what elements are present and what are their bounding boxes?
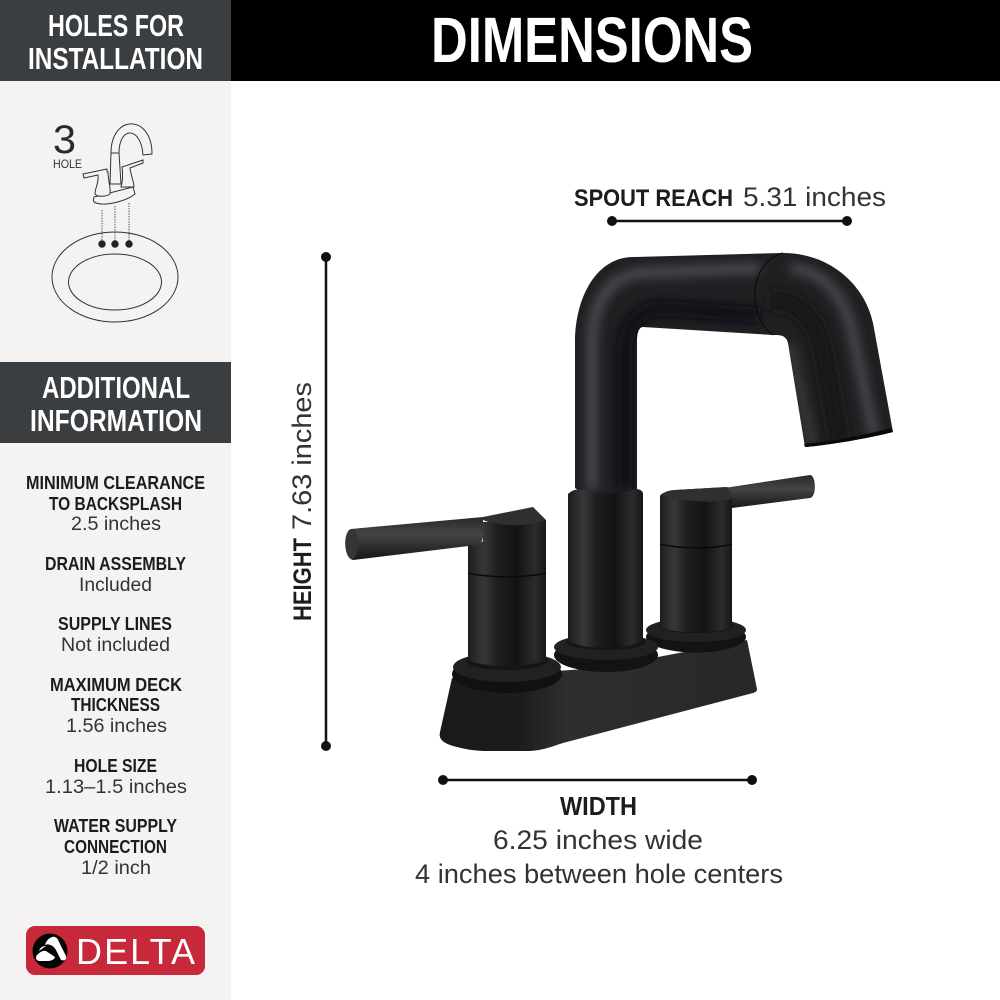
spec: hole size: 1.13–1.5 inches bbox=[45, 776, 187, 798]
logo: delta: DELTA bbox=[76, 931, 195, 972]
center ring bbox=[554, 634, 658, 672]
spec: supply lines bbox=[58, 614, 172, 656]
width dimension: 6.25 inches wide bbox=[493, 825, 703, 855]
spec: hole size bbox=[45, 756, 187, 798]
header: additional information: INFORMATION bbox=[30, 403, 202, 438]
spec: water supply connection: CONNECTION bbox=[64, 837, 167, 857]
spec: drain assembly: Included bbox=[79, 574, 152, 596]
title: dimensions bbox=[231, 0, 1000, 81]
spec: minimum clearance bbox=[26, 473, 205, 535]
header: additional information: ADDITIONAL bbox=[42, 370, 190, 405]
width dimension bbox=[415, 775, 783, 889]
height dimension: 7.63 inches bbox=[287, 382, 317, 530]
icon: 3 hole sink diagram bbox=[52, 118, 178, 322]
sidebar panel bbox=[0, 0, 231, 1000]
faucet product image bbox=[345, 253, 893, 751]
spec: minimum clearance: MINIMUM CLEARANCE bbox=[26, 473, 205, 493]
width dimension: 4 inches between hole centers bbox=[415, 859, 783, 889]
right handle bbox=[660, 475, 815, 632]
icon: 3 hole sink diagram: HOLE bbox=[53, 157, 82, 171]
icon: 3 hole sink diagram: 3 bbox=[53, 118, 76, 162]
spec: water supply connection: 1/2 inch bbox=[81, 857, 151, 879]
height dimension: HEIGHT bbox=[289, 538, 317, 621]
spec: minimum clearance: TO BACKSPLASH bbox=[49, 494, 182, 514]
header: holes for installation bbox=[0, 0, 231, 81]
header: holes for installation: HOLES FOR bbox=[48, 8, 184, 43]
spec: maximum deck thickness: THICKNESS bbox=[71, 695, 160, 715]
spec: water supply connection bbox=[54, 816, 177, 879]
spec: maximum deck thickness: 1.56 inches bbox=[66, 715, 167, 737]
spout reach dimension: SPOUT REACH bbox=[574, 185, 733, 212]
left handle bbox=[345, 507, 546, 666]
header: additional information bbox=[0, 362, 231, 443]
spout bbox=[575, 253, 893, 495]
spec: drain assembly bbox=[45, 554, 186, 596]
logo: delta bbox=[26, 926, 205, 975]
spec: minimum clearance: 2.5 inches bbox=[71, 513, 161, 535]
left handle base bbox=[452, 652, 562, 693]
title: dimensions: DIMENSIONS bbox=[431, 4, 753, 76]
spout reach dimension: 5.31 inches bbox=[743, 182, 886, 212]
center column bbox=[568, 489, 643, 648]
height dimension bbox=[287, 252, 331, 751]
spec: maximum deck thickness: MAXIMUM DECK bbox=[50, 675, 182, 695]
faucet deck plate bbox=[440, 640, 757, 751]
spout reach dimension bbox=[574, 182, 886, 226]
width dimension: WIDTH bbox=[560, 793, 637, 821]
spec: water supply connection: WATER SUPPLY bbox=[54, 816, 177, 836]
spec: hole size: HOLE SIZE bbox=[74, 756, 157, 776]
header: holes for installation: INSTALLATION bbox=[28, 41, 203, 76]
right handle base bbox=[646, 618, 746, 652]
spec: drain assembly: DRAIN ASSEMBLY bbox=[45, 554, 186, 574]
spec: supply lines: SUPPLY LINES bbox=[58, 614, 172, 634]
spec: supply lines: Not included bbox=[61, 634, 170, 656]
spec: maximum deck thickness bbox=[50, 675, 182, 737]
